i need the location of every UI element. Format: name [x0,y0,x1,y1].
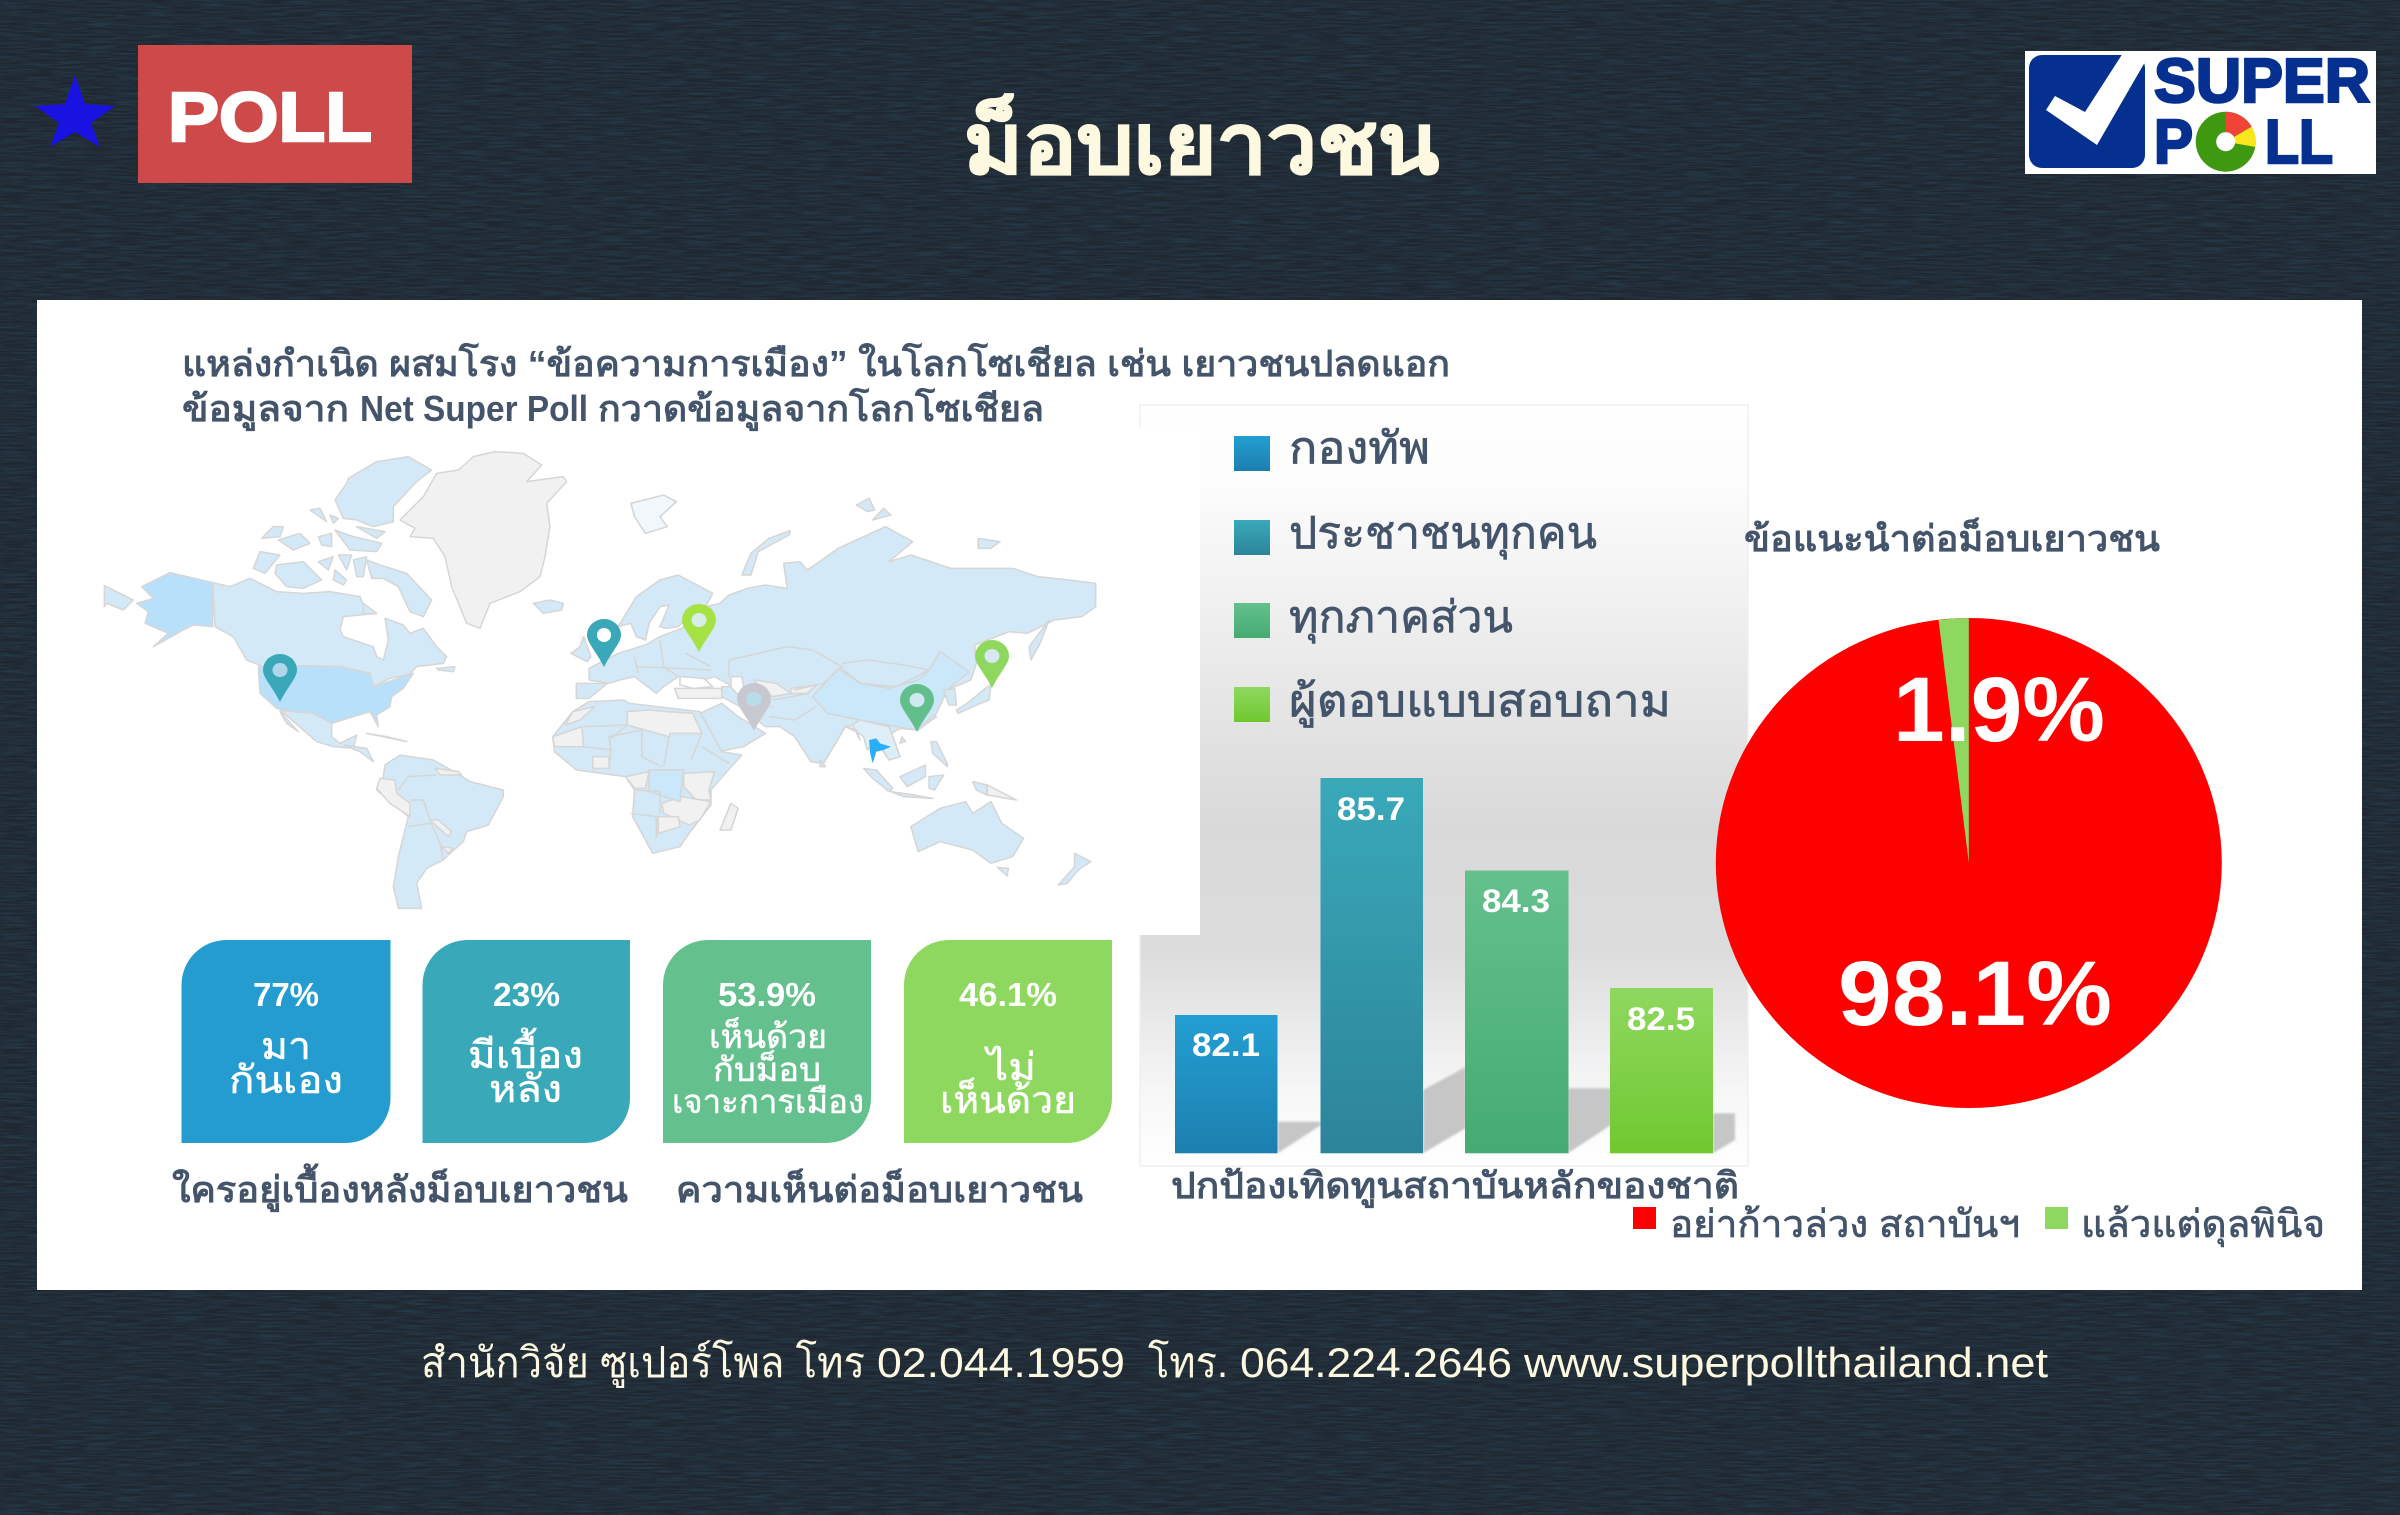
card: 23%: มีเบื้อง [468,1027,583,1077]
title: ม็อบเยาวชน [964,93,1439,191]
card: 53.9%: เห็นด้วย [709,1017,827,1055]
legend: discretion: แล้วแต่ดุลพินิจ [2081,1204,2325,1247]
icon: blue star [35,75,115,147]
bar: 82.1: 82.1 [1192,1027,1260,1063]
bar: 82.5 [1610,988,1713,1153]
bar: 82.5: 82.5 [1627,1001,1695,1037]
caption: who is behind: ใครอยู่เบื้องหลังม็อบเยาวชน [172,1163,628,1213]
card: 23%: หลัง [489,1069,562,1111]
bar: 84.3: 84.3 [1482,883,1550,919]
footer: สำนักวิจัย ซูเปอร์โพล โทร [421,1338,865,1388]
footer: 02.044.1959 [877,1339,1125,1386]
caption: bar chart: ปกป้องเทิดทูนสถาบันหลักของชาติ [1171,1165,1739,1209]
logo: Super Poll [2025,47,2376,177]
legend: army: กองทัพ [1289,424,1430,473]
footer: โทร. [1148,1338,1228,1386]
label: 1.9%: 1.9% [1893,659,2105,761]
card: 46.1% [904,940,1112,1143]
card: 53.9%: 53.9% [718,976,816,1013]
legend: all people: ประชาชนทุกคน [1289,509,1597,560]
caption: opinion: ความเห็นต่อม็อบเยาวชน [676,1167,1083,1210]
logo: Super Poll: P [2154,108,2193,177]
heading: source description: Net Super Poll [360,388,588,429]
heading: source description: ข้อมูลจาก [182,388,349,432]
heading: source description [182,342,1450,432]
card: 77%: กันเอง [229,1060,343,1102]
bar: 85.7: 85.7 [1337,791,1405,827]
footer: 064.224.2646 [1240,1339,1512,1386]
bar: 84.3 [1465,870,1568,1153]
bar: 85.7 [1320,778,1423,1153]
logo: Super Poll: LL [2265,108,2333,177]
legend: all sectors: ทุกภาคส่วน [1289,593,1513,644]
card: 53.9%: เจาะการเมือง [672,1083,864,1120]
label: 98.1%: 98.1% [1838,943,2112,1045]
card: 23%: 23% [493,976,560,1013]
card: 23% [422,940,630,1143]
heading: pie chart: ข้อแนะนำต่อม็อบเยาวชน [1744,516,2160,559]
card: 53.9%: กับม็อบ [713,1050,821,1088]
card: 46.1%: 46.1% [959,976,1057,1013]
world map [104,452,1096,908]
badge: POLL [138,45,412,183]
badge: POLL: POLL [168,78,372,156]
bar shadows [1278,1067,1735,1153]
legend: army [1234,424,1430,473]
bar chart [1138,405,1748,1166]
heading: source description: กวาดข้อมูลจากโลกโซเชียล [598,387,1044,432]
legend: respondents: ผู้ตอบแบบสอบถาม [1289,677,1671,728]
footer [421,1338,2048,1388]
card: 77%: 77% [253,976,319,1013]
card: 46.1%: เห็นด้วย [940,1077,1076,1122]
card: 53.9% [663,940,871,1143]
panel: white content area [37,300,2362,1290]
card: 77% [182,940,390,1143]
legend: do not overstep: อย่าก้าวล่วง สถาบันฯ [1670,1204,2020,1246]
pie chart [1716,618,2222,1108]
heading: source description: แหล่งกำเนิด ผสมโรง “ข้อความการเมือง” ในโลกโซเชียล เช่น เยาวชนปลดแอก [182,342,1450,384]
logo: Super Poll: SUPER [2154,47,2370,116]
icon: map pins [263,604,1009,732]
card: 46.1%: ไม่ [984,1046,1036,1089]
card: 77%: มา [261,1026,311,1068]
bar: 82.1 [1175,1015,1278,1153]
footer: www.superpollthailand.net [1523,1339,2048,1386]
